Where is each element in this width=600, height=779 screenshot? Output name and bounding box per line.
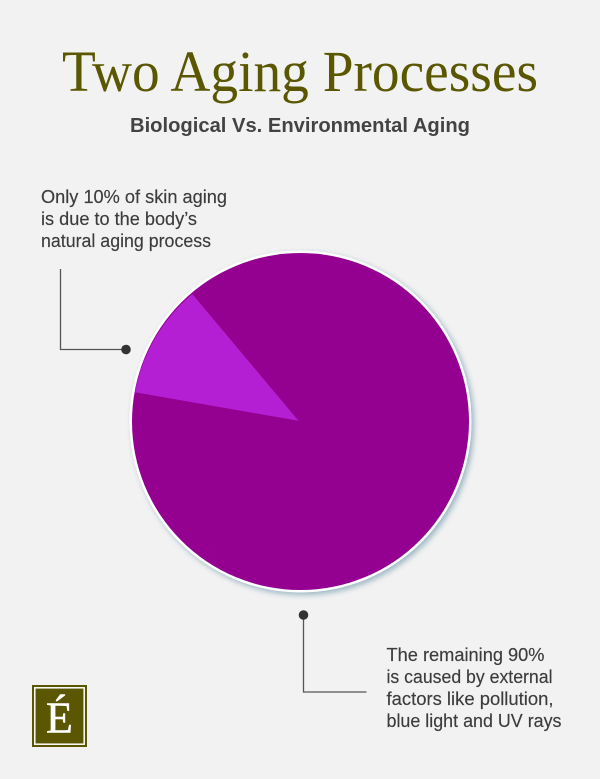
leader line to light wedge [60,269,131,354]
callout text: remaining 90%: factors like pollution, [386,689,554,709]
callout text: remaining 90%: is caused by external [386,667,552,687]
callout text: remaining 90%: The remaining 90% [386,645,544,665]
callout: environmental aging [299,610,562,731]
callout text: remaining 90%: blue light and UV rays [386,711,562,731]
title: Two Aging Processes [62,39,538,104]
logo: É [46,694,73,742]
pie chart [130,250,474,595]
subtitle: Biological Vs. Environmental Aging [130,115,470,137]
callout: biological aging [41,187,232,354]
slice: biological aging 10% [135,294,298,421]
callout text: only 10%: natural aging process [41,231,211,251]
leader line to dark slice [299,610,366,692]
callout text: only 10%: Only 10% of skin aging [41,187,227,207]
slice: environmental aging 90% [132,253,469,590]
callout text: only 10%: is due to the body’s [41,209,197,229]
logo [32,685,87,747]
